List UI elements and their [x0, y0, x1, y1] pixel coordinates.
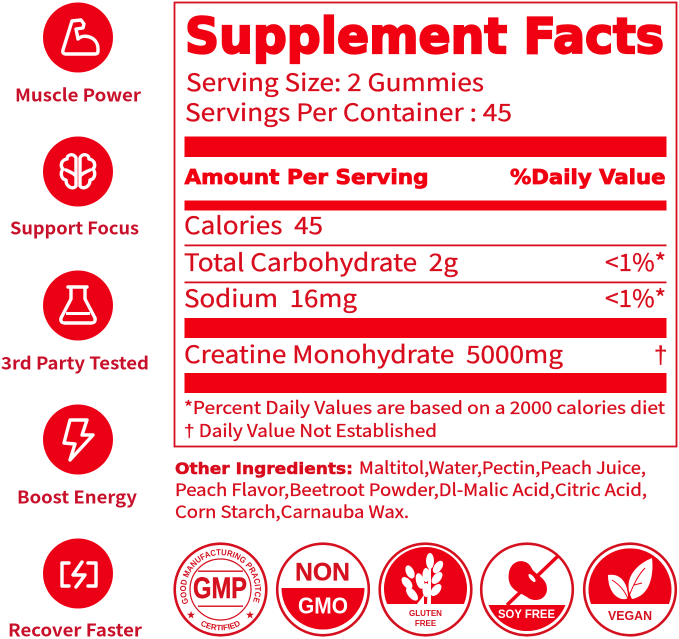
bar: top	[184, 136, 666, 157]
benefit: recover faster	[8, 538, 142, 639]
badge: GMP certified: CERTIFIED	[201, 621, 240, 630]
badge: gluten free	[380, 544, 471, 635]
badge: GMP certified: ★	[187, 610, 196, 620]
value: sodium percent: <1%*	[605, 279, 666, 314]
text block: other ingredients	[175, 454, 647, 523]
servings per container: Servings Per Container : 45	[185, 93, 512, 128]
title: Supplement Facts	[185, 8, 664, 65]
row: creatine monohydrate: Creatine Monohydrate 5000mg	[184, 335, 563, 370]
benefit: boost energy: Boost Energy	[17, 484, 137, 510]
row: calories: Calories 45	[184, 206, 323, 241]
badge: soy free	[481, 544, 573, 635]
badge: GMP certified: GOOD MANUFACTURING PRACITCE	[180, 549, 261, 604]
benefit: third party tested	[1, 270, 149, 376]
text block: other ingredients: Corn Starch,Carnauba Wax.	[175, 498, 409, 523]
badge: vegan: VEGAN	[608, 609, 652, 623]
text block: other ingredients: Peach Flavor,Beetroot Powder,Dl-Malic Acid,Citric Acid,	[175, 476, 647, 501]
row: sodium: Sodium 16mg	[184, 279, 357, 314]
text block: other ingredients: Maltitol,Water,Pectin,Peach Juice,	[359, 454, 646, 479]
badge: gluten free: GLUTEN	[409, 609, 442, 618]
benefit: boost energy	[17, 404, 137, 510]
benefit: third party tested: 3rd Party Tested	[1, 350, 149, 376]
panel: benefits column	[1, 2, 149, 639]
column heading: amount per serving: Amount Per Serving	[184, 165, 428, 189]
benefit: support focus	[10, 136, 139, 240]
benefit: muscle power: Muscle Power	[15, 82, 141, 108]
footnote: percent daily values: *Percent Daily Values are based on a 2000 calories diet	[184, 395, 665, 420]
bar: bottom	[184, 373, 666, 393]
bar: heading rule	[184, 200, 666, 210]
column heading: daily value: %Daily Value	[510, 165, 666, 189]
badge: non GMO: NON	[295, 558, 350, 586]
badge: GMP certified	[173, 542, 268, 637]
badge: non GMO	[277, 544, 369, 635]
text block: other ingredients: Other Ingredients:	[175, 459, 353, 478]
footnote: daily value not established: † Daily Value Not Established	[184, 418, 437, 443]
panel: supplement facts	[174, 2, 676, 446]
badge: soy free: SOY FREE	[498, 609, 555, 621]
value: carbohydrate percent: <1%*	[605, 243, 666, 278]
badge: vegan	[584, 544, 676, 635]
badge: non GMO: GMO	[298, 592, 348, 618]
bar: middle	[184, 318, 666, 338]
benefit: muscle power	[15, 2, 141, 108]
value: creatine dagger: †	[654, 342, 667, 369]
badge: GMP certified: GMP	[193, 572, 247, 605]
badge: gluten free: FREE	[415, 619, 437, 628]
row: total carbohydrate: Total Carbohydrate 2g	[184, 243, 459, 278]
badge: GMP certified: ★	[246, 610, 255, 620]
serving size: Serving Size: 2 Gummies	[186, 63, 484, 98]
benefit: support focus: Support Focus	[10, 216, 139, 240]
